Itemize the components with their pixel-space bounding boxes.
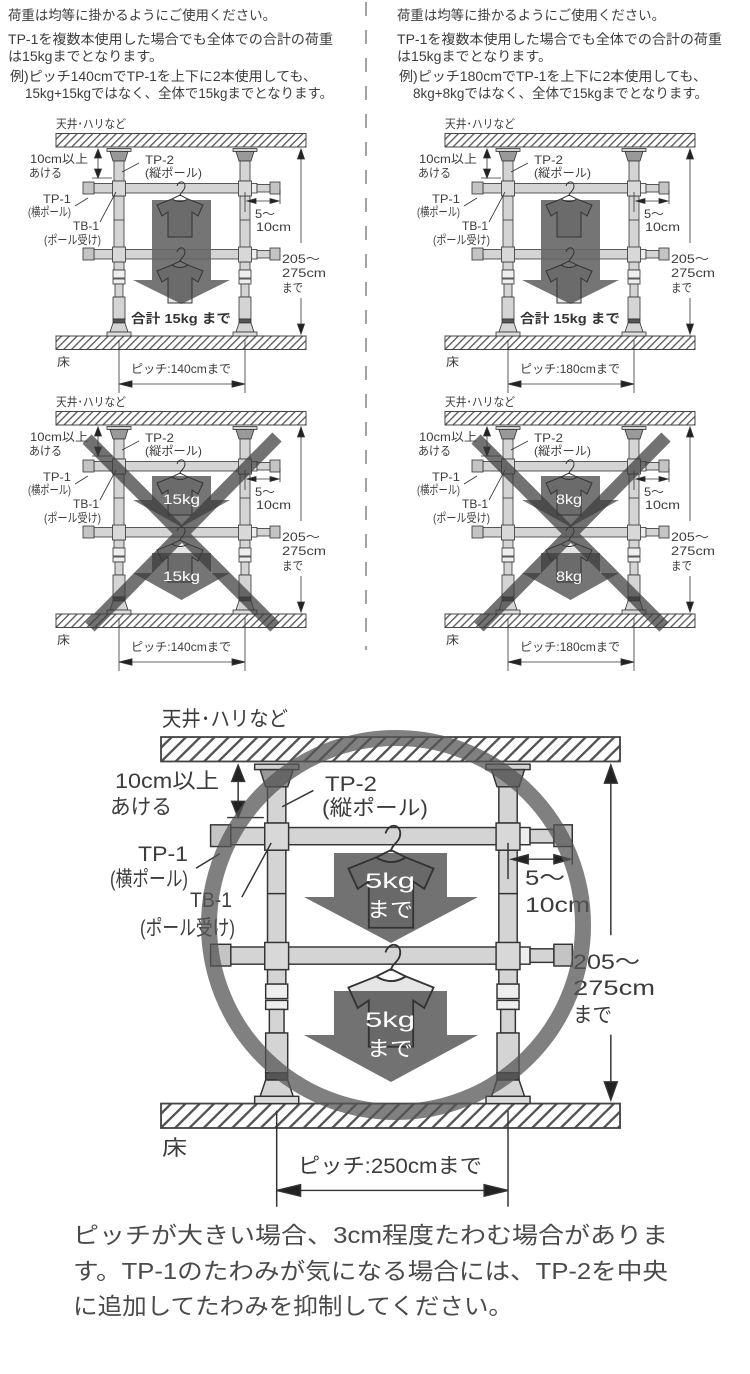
panel: large diagram 5kg per rod: TB-1 [190, 889, 232, 912]
panel: left correct diagram: ピッチ:140cmまで [131, 362, 231, 376]
panel: large diagram 5kg per rod: 5kg [365, 870, 415, 893]
panel: right column notes: 8kg+8kgではなく、全体で15kgまでとなります。 [413, 86, 708, 101]
panel: right correct diagram [417, 117, 715, 393]
bottom note text [73, 1222, 668, 1319]
panel: left prohibited diagram: 275cm [282, 544, 326, 558]
panel: right correct diagram: TP-2 [534, 153, 563, 167]
panel: left prohibited diagram: 10cm [256, 498, 291, 512]
panel: left correct diagram: 275cm [282, 266, 326, 280]
panel: left prohibited diagram: (ポール受け) [44, 511, 101, 525]
panel: right correct diagram: TB-1 [462, 219, 488, 233]
panel: right column notes: TP-1を複数本使用した場合でも全体での合計の荷重 [397, 31, 722, 47]
panel: right prohibited diagram: 10cm以上 [419, 430, 477, 444]
panel: left correct diagram: (ポール受け) [44, 233, 101, 247]
panel: left column notes: 例)ピッチ140cmでTP-1を上下に2本使用しても、 [10, 68, 317, 84]
panel: large diagram 5kg per rod: TP-2 [325, 773, 377, 796]
panel: right correct diagram: 10cm以上 [419, 152, 477, 166]
panel: left prohibited diagram: TB-1 [73, 497, 99, 511]
panel: right prohibited diagram: 275cm [671, 544, 715, 558]
panel: left correct diagram: (縦ポール) [145, 166, 202, 180]
panel: right correct diagram: 合計 15kg まで [520, 311, 620, 326]
panel: large diagram 5kg per rod: 275cm [573, 977, 655, 1000]
panel: right prohibited diagram: まで [671, 559, 692, 573]
panel: right prohibited diagram: 床 [446, 633, 459, 647]
panel: left correct diagram: 10cm以上 [30, 152, 88, 166]
panel: large diagram 5kg per rod: まで [367, 899, 413, 922]
panel: left correct diagram: あける [29, 166, 62, 180]
panel: right prohibited diagram: 8kg [556, 568, 582, 584]
panel: left column notes: TP-1を複数本使用した場合でも全体での合計の荷重 [8, 31, 333, 47]
panel: large diagram 5kg per rod: 10cm [525, 894, 590, 917]
panel: right prohibited diagram: 10cm [645, 498, 680, 512]
panel: right correct diagram: (横ポール) [417, 205, 460, 219]
panel: right prohibited diagram: 205～ [671, 530, 709, 544]
panel: left correct diagram: TP-1 [43, 192, 71, 206]
panel: right correct diagram: 10cm [645, 220, 680, 234]
panel: left correct diagram: 5～ [255, 207, 275, 221]
panel: large diagram 5kg per rod: まで [367, 1038, 413, 1061]
bottom note text: に追加してたわみを抑制してください。 [73, 1293, 513, 1319]
panel: right prohibited diagram: ピッチ:180cmまで [520, 640, 620, 654]
panel: left correct diagram: (横ポール) [28, 205, 71, 219]
panel: large diagram 5kg per rod: TP-1 [138, 843, 188, 866]
panel: left prohibited diagram: まで [282, 559, 303, 573]
bottom note text: ピッチが大きい場合、3cm程度たわむ場合がありま [73, 1222, 668, 1248]
panel: large diagram 5kg per rod: 205～ [573, 951, 640, 974]
panel: left column notes: 荷重は均等に掛かるようにご使用ください。 [8, 7, 276, 23]
panel: right prohibited diagram: (縦ポール) [534, 444, 591, 458]
panel: left correct diagram: TB-1 [73, 219, 99, 233]
panel: right prohibited diagram: (ポール受け) [433, 511, 490, 525]
panel: right prohibited diagram: TB-1 [462, 497, 488, 511]
panel: left column notes [8, 7, 333, 101]
panel: right correct diagram: まで [671, 281, 692, 295]
panel: right prohibited diagram: TP-1 [432, 470, 460, 484]
panel: left prohibited diagram: ピッチ:140cmまで [131, 640, 231, 654]
panel: right correct diagram: (ポール受け) [433, 233, 490, 247]
panel: right prohibited diagram: 5～ [644, 485, 664, 499]
panel: left prohibited diagram: 205～ [282, 530, 320, 544]
panel: right correct diagram: 床 [446, 355, 459, 369]
panel: right prohibited diagram: 天井･ハリなど [445, 395, 515, 409]
panel: right correct diagram: (縦ポール) [534, 166, 591, 180]
panel: left prohibited diagram: (縦ポール) [145, 444, 202, 458]
panel: left prohibited diagram: 床 [57, 633, 70, 647]
panel: right prohibited diagram: TP-2 [534, 431, 563, 445]
divider between columns [365, 2, 367, 650]
panel: left prohibited diagram: (横ポール) [28, 483, 71, 497]
panel: left prohibited diagram: 15kg [163, 491, 200, 507]
panel: left prohibited diagram: TP-1 [43, 470, 71, 484]
panel: left prohibited diagram: 5～ [255, 485, 275, 499]
panel: large diagram 5kg per rod [110, 708, 655, 1207]
panel: right column notes: は15kgまでとなります。 [397, 49, 552, 64]
panel: right prohibited diagram: あける [418, 444, 451, 458]
panel: left correct diagram: 205～ [282, 252, 320, 266]
panel: left prohibited diagram [28, 395, 326, 671]
panel: left correct diagram: 10cm [256, 220, 291, 234]
panel: left correct diagram [28, 117, 326, 393]
panel: left prohibited diagram: 15kg [163, 568, 200, 584]
panel: left column notes: は15kgまでとなります。 [8, 49, 163, 64]
panel: right column notes: 例)ピッチ180cmでTP-1を上下に2本使用しても、 [399, 68, 707, 84]
panel: right prohibited diagram [417, 395, 715, 671]
panel: large diagram 5kg per rod: ピッチ:250cmまで [298, 1155, 482, 1178]
panel: left prohibited diagram: 天井･ハリなど [56, 395, 126, 409]
panel: right correct diagram: 275cm [671, 266, 715, 280]
panel: large diagram 5kg per rod: 5kg [365, 1009, 415, 1032]
panel: large diagram 5kg per rod: あける [110, 796, 172, 819]
panel: right correct diagram: 205～ [671, 252, 709, 266]
panel: large diagram 5kg per rod: (縦ポール) [322, 797, 428, 820]
panel: right correct diagram: 5～ [644, 207, 664, 221]
panel: large diagram 5kg per rod: まで [573, 1004, 612, 1027]
panel: left correct diagram: TP-2 [145, 153, 174, 167]
panel: large diagram 5kg per rod: (ポール受け) [140, 917, 235, 940]
panel: left correct diagram: まで [282, 281, 303, 295]
panel: right correct diagram: ピッチ:180cmまで [520, 362, 620, 376]
panel: right correct diagram: 天井･ハリなど [445, 117, 515, 131]
panel: right prohibited diagram: (横ポール) [417, 483, 460, 497]
panel: large diagram 5kg per rod: 天井･ハリなど [162, 708, 288, 731]
panel: left correct diagram: 合計 15kg まで [131, 311, 231, 326]
panel: left column notes: 15kg+15kgではなく、全体で15kgまでとなります。 [25, 86, 333, 101]
panel: large diagram 5kg per rod: 5～ [525, 867, 565, 890]
panel: right column notes: 荷重は均等に掛かるようにご使用ください。 [397, 7, 665, 23]
panel: left prohibited diagram: 10cm以上 [30, 430, 88, 444]
panel: right correct diagram: TP-1 [432, 192, 460, 206]
panel: left prohibited diagram: TP-2 [145, 431, 174, 445]
panel: left correct diagram: 天井･ハリなど [56, 117, 126, 131]
panel: right correct diagram: あける [418, 166, 451, 180]
panel: large diagram 5kg per rod: 床 [162, 1137, 187, 1160]
bottom note text: す。TP-1のたわみが気になる場合には、TP-2を中央 [73, 1258, 668, 1284]
panel: right prohibited diagram: 8kg [556, 491, 582, 507]
panel: large diagram 5kg per rod: 10cm以上 [115, 770, 219, 793]
panel: large diagram 5kg per rod: (横ポール) [110, 868, 188, 891]
panel: right column notes [397, 7, 722, 101]
panel: left correct diagram: 床 [57, 355, 70, 369]
panel: left prohibited diagram: あける [29, 444, 62, 458]
